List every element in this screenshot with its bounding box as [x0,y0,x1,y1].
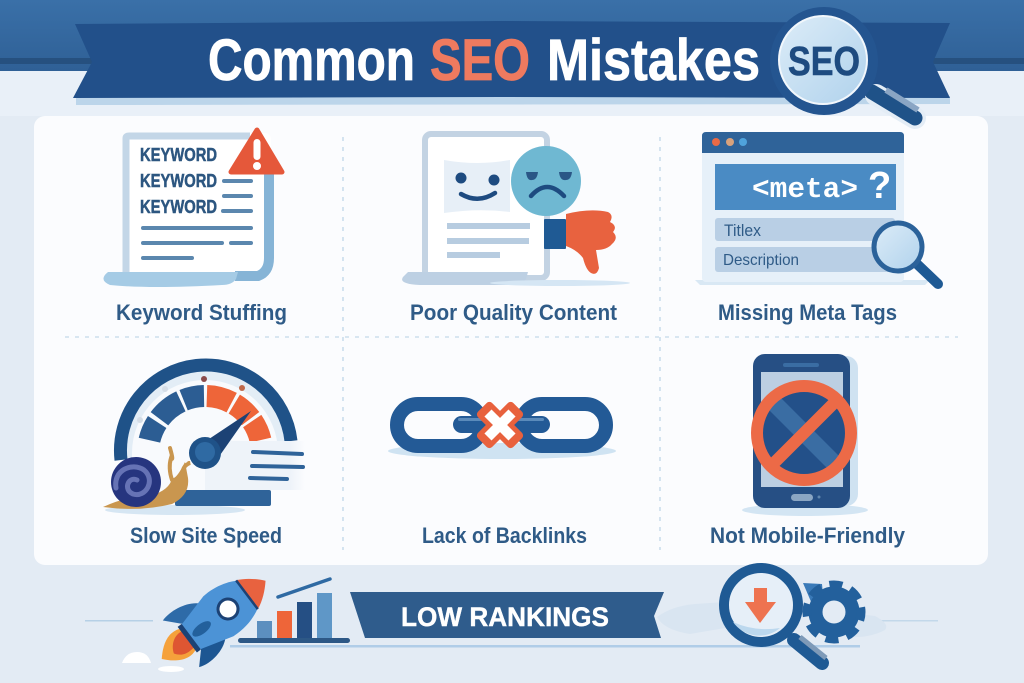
window [214,595,242,623]
panel: not mobile-friendly [710,354,906,548]
icon: small magnifier [874,223,938,284]
icon: snail [103,448,190,509]
icon: phone with prohibition sign [742,354,868,516]
icon: clouds [122,652,184,672]
header magnifier with SEO: SEO [788,38,860,84]
icon: rocket [143,556,284,683]
icon: warning triangle [231,130,282,172]
body [174,562,278,658]
label: Keyword Stuffing [116,300,287,325]
bar chart [238,579,350,643]
icon: browser window: Titlex [724,221,761,240]
panel: poor quality content [402,134,630,325]
footer guide lines [85,602,938,648]
label: Slow Site Speed [130,523,282,548]
panel: keyword stuffing [103,130,287,325]
label: Poor Quality Content [410,300,618,325]
label: Lack of Backlinks [422,523,587,548]
fins [162,596,204,633]
nozzle [178,624,201,652]
icon: speedometer [105,365,305,515]
icon: browser window: ? [868,165,891,207]
icon: document with smile [402,134,547,285]
icon: sad face [511,146,581,216]
icon: thumbs down [490,210,630,286]
panel dividers [65,137,958,550]
slot [190,618,213,639]
header band [0,0,1024,116]
icon: browser window: Description [723,252,799,269]
icon: browser window [695,132,930,285]
flame [153,627,197,671]
icon: broken chain [388,390,616,460]
low rankings banner: LOW RANKINGS [401,602,609,632]
title banner [73,21,950,105]
low rankings banner [350,592,664,638]
title last word: Mistakes [547,28,760,93]
label: Missing Meta Tags [718,300,897,325]
panel: lack of backlinks [388,390,616,548]
icon: document with keywords [103,133,271,287]
header magnifier with SEO [770,7,918,118]
label: Not Mobile-Friendly [710,523,906,548]
main panel [34,116,988,565]
title highlight word: SEO [430,28,530,93]
icon: document with keywords: KEYWORD [140,171,217,191]
banner ribbon [73,21,950,98]
title text: Common [208,28,415,93]
icon: document with keywords: KEYWORD [140,197,217,217]
icon: gear [803,583,861,639]
icon: magnifier with down arrow [724,568,826,663]
icon: browser window: <meta> [752,173,858,206]
icon: document with keywords: KEYWORD [140,145,217,165]
nose [236,566,276,609]
panel: missing meta tags [695,132,938,325]
nose band [235,580,259,610]
panel: slow site speed [103,365,305,548]
